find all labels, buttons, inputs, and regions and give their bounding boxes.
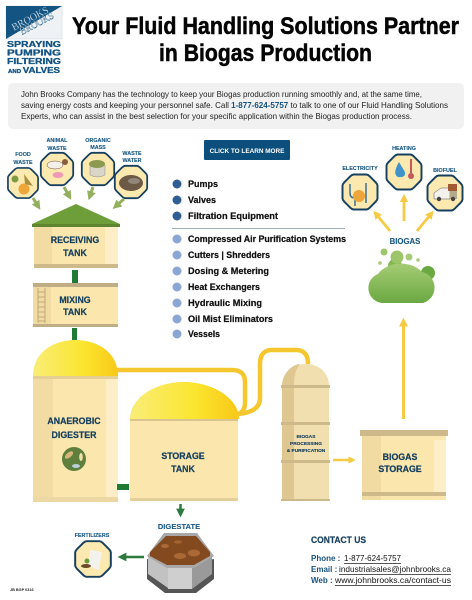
- storage tank: STORAGE: [161, 451, 205, 461]
- receiving tank: TANK: [63, 248, 88, 258]
- list: primary products: Filtration Equipment: [188, 211, 278, 221]
- output: electricity: ELECTRICITY: [342, 166, 378, 172]
- list: secondary products: Oil Mist Eliminators: [188, 314, 273, 324]
- list: secondary products: Heat Exchangers: [188, 282, 260, 292]
- contact us: Web :: [311, 576, 333, 585]
- list: secondary products: [172, 234, 346, 339]
- contact us: CONTACT US: [311, 535, 366, 545]
- pipe: mixing to digester: [72, 328, 77, 340]
- logo: [6, 5, 62, 75]
- biogas arrows: [376, 198, 431, 231]
- list: primary products: Pumps: [188, 179, 218, 189]
- input: food waste: [8, 152, 38, 198]
- input arrows: [33, 187, 124, 206]
- output: heating: HEATING: [392, 146, 416, 152]
- input: waste water: WASTE: [122, 151, 142, 157]
- biogas storage: STORAGE: [378, 464, 422, 474]
- pipe: digester to storage: [117, 484, 129, 490]
- intro text panel: John Brooks Company has the technology to keep your Biogas production running smoothly and, at the same time,: [21, 89, 422, 99]
- output: fertilizers: [75, 533, 111, 577]
- input: organic mass: ORGANIC: [85, 138, 111, 144]
- contact us: [311, 535, 451, 586]
- output: fertilizers: FERTILIZERS: [75, 533, 110, 539]
- biogas processing and purification column: PROCESSING: [290, 441, 322, 447]
- list: secondary products: Compressed Air Purification Systems: [188, 234, 346, 244]
- title: in Biogas Production: [159, 40, 372, 67]
- biogas storage: [360, 430, 448, 500]
- logo: SPRAYING: [7, 40, 61, 49]
- digestate: [147, 522, 214, 593]
- contact us: Email :: [311, 565, 337, 574]
- contact us: www.johnbrooks.ca/contact-us: [334, 576, 451, 585]
- input: food waste: WASTE: [13, 160, 33, 166]
- biogas cloud: [368, 237, 435, 303]
- input: waste water: [115, 151, 147, 198]
- arrow: digestate to fertilizers: [122, 556, 144, 558]
- input: animal waste: [41, 138, 73, 185]
- output: heating: [387, 146, 421, 189]
- icon: bacteria: [62, 447, 86, 471]
- pipe: receiving to mixing: [72, 270, 78, 284]
- input: organic mass: MASS: [90, 145, 106, 151]
- output: electricity: [342, 166, 378, 209]
- output: biofuel: BIOFUEL: [433, 168, 458, 174]
- gas pipe: [116, 350, 308, 414]
- biogas processing and purification column: & PURIFICATION: [287, 448, 326, 454]
- mixing tank: TANK: [63, 307, 88, 317]
- input: waste water: WATER: [122, 158, 142, 164]
- list: primary products: Valves: [188, 195, 216, 205]
- arrow: storage to digestate: [179, 504, 182, 513]
- anaerobic digester: ANAEROBIC: [47, 416, 101, 426]
- biogas processing and purification column: [281, 364, 330, 501]
- logo: BROOKS: [10, 5, 51, 34]
- output: biofuel: [428, 168, 462, 210]
- list: primary products: [172, 179, 278, 221]
- storage tank: TANK: [171, 464, 196, 474]
- logo: PUMPING: [7, 48, 61, 58]
- logo: AND VALVES: [8, 66, 61, 75]
- arrow: storage to biogas cloud: [402, 322, 405, 419]
- arrow: purification to storage: [333, 459, 352, 461]
- input: food waste: FOOD: [15, 152, 31, 158]
- contact us: industrialsales@johnbrooks.ca: [339, 565, 451, 574]
- anaerobic digester: DIGESTER: [52, 430, 97, 440]
- code: JB BGP 0316: [10, 588, 34, 592]
- logo: BROOKS: [18, 11, 56, 38]
- input: animal waste: WASTE: [47, 146, 67, 152]
- mixing tank: MIXING: [59, 295, 91, 305]
- list: secondary products: Dosing & Metering: [188, 266, 269, 276]
- biogas cloud: BIOGAS: [390, 237, 420, 246]
- list: secondary products: Vessels: [188, 329, 220, 339]
- button: click to learn more: CLICK TO LEARN MORE: [210, 148, 285, 155]
- title: [72, 13, 459, 67]
- input: animal waste: ANIMAL: [47, 138, 68, 144]
- mixing tank: [33, 283, 118, 327]
- intro text panel: Experts, who can assist in the best selection for your specific application within the Biogas production process.: [21, 111, 412, 121]
- button: click to learn more: [204, 140, 290, 160]
- contact us: Phone :: [311, 554, 340, 563]
- biogas processing and purification column: BIOGAS: [297, 434, 316, 440]
- biogas storage: BIOGAS: [383, 452, 417, 462]
- anaerobic digester: [33, 340, 118, 502]
- logo: FILTERING: [7, 57, 61, 66]
- receiving tank: [32, 204, 120, 268]
- intro text panel: [8, 83, 464, 129]
- receiving tank: RECEIVING: [51, 235, 99, 245]
- contact us: 1-877-624-5757: [344, 554, 401, 563]
- list: secondary products: Hydraulic Mixing: [188, 298, 262, 308]
- list: secondary products: Cutters | Shredders: [188, 250, 270, 260]
- storage tank: [130, 382, 239, 501]
- digestate: DIGESTATE: [158, 522, 200, 531]
- input: organic mass: [82, 138, 114, 185]
- intro text panel: saving energy costs and keeping your personnel safe. Call 1-877-624-5757 to talk to one of our Fluid Handling Solutions: [21, 100, 448, 110]
